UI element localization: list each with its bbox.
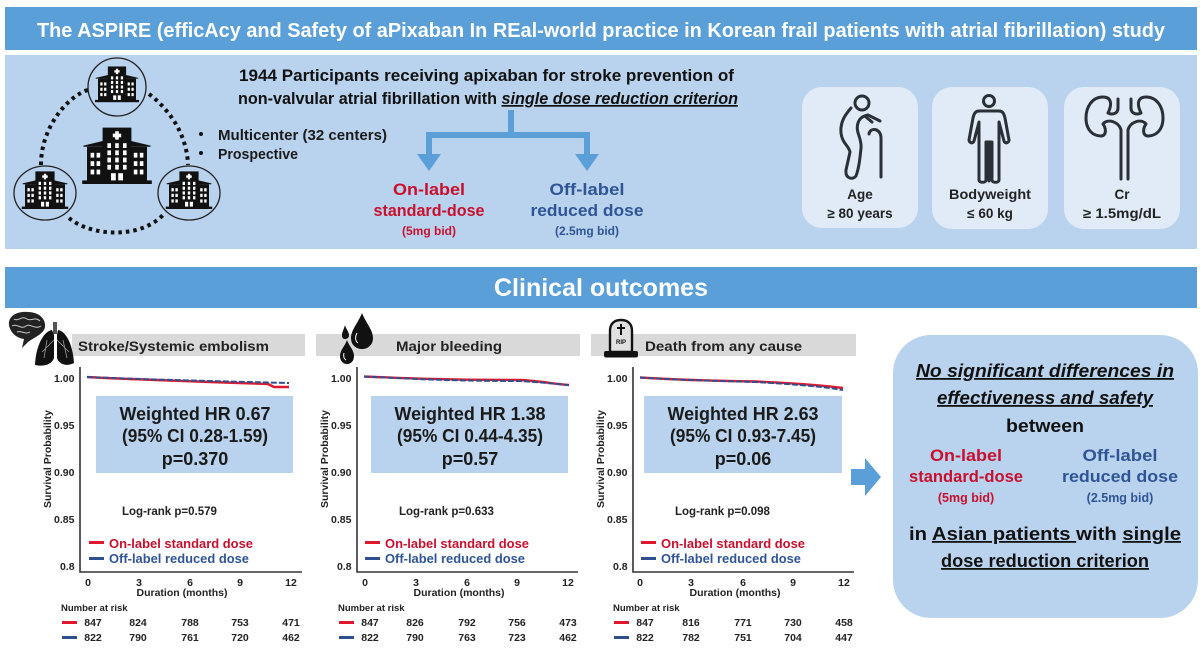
survival chart [319,367,578,599]
legend: On-label standard dose [109,537,253,551]
panel: stroke/systemic embolism [9,312,305,644]
outcome heading: Death from any cause [645,338,802,354]
heading: clinical outcomes: Clinical outcomes [494,274,708,302]
on-label dose: (5mg bid) [938,491,994,505]
card: age: ≥ 80 years [827,206,893,221]
survival chart: 3 [413,577,419,589]
number at risk table: 826 [406,617,424,629]
survival chart: 9 [237,577,243,589]
survival chart: 0.90 [331,467,352,479]
survival chart: Log-rank p=0.579 [122,506,217,518]
survival chart: 6 [464,577,470,589]
hazard ratio box [96,396,293,473]
survival chart: Log-rank p=0.633 [399,506,494,518]
hazard ratio box: (95% CI 0.28-1.59) [122,426,268,446]
survival chart: 0.8 [613,561,628,573]
card: creatinine [1064,87,1180,229]
number at risk table: 720 [231,632,249,644]
participants text: 1944 Participants receiving apixaban for stroke prevention of [239,66,734,85]
conclusion statement: No significant differences in [916,361,1174,381]
card: bodyweight: ≤ 60 kg [967,206,1013,221]
survival chart: Survival Probability [319,410,331,508]
number at risk table: 847 [84,617,102,629]
icon: elderly person with cane [841,96,881,178]
number at risk table: 822 [361,632,379,644]
number at risk table: 447 [835,632,853,644]
survival chart: 0.95 [607,420,628,432]
number at risk table [613,603,853,644]
survival chart: 0 [362,577,368,589]
on-label dose [374,180,484,238]
card: age [802,87,918,228]
card: bodyweight: Bodyweight [949,187,1032,202]
number at risk table: 753 [231,617,249,629]
patient population: dose reduction criterion [941,551,1149,571]
legend [641,537,805,566]
survival chart: 1.00 [607,373,628,385]
legend: On-label standard dose [385,537,529,551]
off-label dose: reduced dose [1062,467,1178,486]
icon: brain and lungs [9,312,74,366]
off-label dose: Off-label [1082,446,1158,465]
survival chart: 12 [285,577,297,589]
number at risk table: 847 [636,617,654,629]
survival chart: 3 [688,577,694,589]
legend: Off-label reduced dose [109,552,249,566]
card: creatinine: ≥ 1.5mg/dL [1083,206,1161,221]
card: bodyweight [932,87,1048,229]
outcome heading: Major bleeding [396,338,502,354]
hazard ratio box: Weighted HR 1.38 [394,404,546,424]
off-label dose: (2.5mg bid) [1087,491,1153,505]
off-label dose: Off-label [550,180,624,199]
heading: clinical outcomes [5,267,1197,308]
panel: death from any cause [591,320,856,644]
survival chart: Log-rank p=0.098 [675,506,771,518]
number at risk table: 792 [458,617,476,629]
off-label dose: (2.5mg bid) [555,224,619,238]
card: creatinine: Cr [1114,187,1130,202]
survival chart: 0.95 [331,420,352,432]
survival chart: 0 [85,577,91,589]
on-label dose: (5mg bid) [402,224,456,238]
survival chart: 0.95 [54,420,75,432]
survival chart: 0.90 [607,467,628,479]
icon: gravestone: RIP [616,340,626,346]
number at risk table: 790 [406,632,424,644]
on-label dose [909,446,1023,505]
hazard ratio box: p=0.57 [442,449,498,469]
icon: kidneys [1086,97,1163,179]
participants text [238,66,738,108]
number at risk table: 790 [129,632,147,644]
survival chart: 3 [136,577,142,589]
survival chart: 1.00 [54,373,75,385]
number at risk table: 756 [508,617,526,629]
number at risk table: 458 [835,617,853,629]
conclusion statement: between [1006,416,1084,436]
legend: Off-label reduced dose [385,552,525,566]
outcome heading [591,334,856,356]
survival chart: Survival Probability [42,410,54,508]
hazard ratio box: Weighted HR 0.67 [120,404,270,424]
icon: hospital network [14,58,220,232]
survival chart: 9 [790,577,796,589]
conclusion statement [916,361,1174,436]
icon: gravestone [604,320,638,358]
participants text: non-valvular atrial fibrillation with single dose reduction criterion [238,89,738,108]
survival chart: 0.8 [337,561,352,573]
survival chart: 6 [187,577,193,589]
number at risk table: 824 [129,617,147,629]
survival chart: 0.85 [54,514,75,526]
outcome heading: Stroke/Systemic embolism [78,338,269,354]
outcome heading [72,334,305,356]
number at risk table: 473 [559,617,577,629]
patient population: in Asian patients with single [909,524,1181,544]
survival chart: 0.85 [331,514,352,526]
panel: major bleeding [316,313,580,644]
title banner [5,7,1197,50]
number at risk table: 723 [508,632,526,644]
legend: Off-label reduced dose [661,552,801,566]
survival chart: Survival Probability [595,410,607,508]
survival chart: Duration (months) [136,587,228,599]
off-label dose: reduced dose [530,201,644,220]
number at risk table [61,603,300,644]
survival chart: 9 [514,577,520,589]
survival chart: 0.85 [607,514,628,526]
patient population [909,524,1181,571]
icon: blood drops [340,313,373,364]
arrows: dose split [417,110,599,171]
off-label dose [1062,446,1178,505]
legend [89,537,253,566]
number at risk table [338,603,577,644]
number at risk table: 471 [282,617,300,629]
legend [365,537,529,566]
number at risk table: Number at risk [613,603,680,614]
number at risk table: 462 [282,632,300,644]
survival chart: 12 [838,577,850,589]
study design bullets [199,128,387,163]
off-label dose [530,180,644,238]
legend: On-label standard dose [661,537,805,551]
number at risk table: 462 [559,632,577,644]
hazard ratio box: p=0.370 [162,449,228,469]
conclusion statement: effectiveness and safety [937,388,1154,408]
survival chart [595,367,854,599]
icon: standing person [969,96,1009,182]
number at risk table: 822 [636,632,654,644]
hazard ratio box: (95% CI 0.93-7.45) [670,426,816,446]
number at risk table: 730 [784,617,802,629]
outcome heading [316,334,580,356]
number at risk table: 822 [84,632,102,644]
number at risk table: 761 [181,632,199,644]
number at risk table: 704 [784,632,802,644]
on-label dose: standard-dose [374,201,484,220]
number at risk table: 847 [361,617,379,629]
arrow: to conclusion [851,458,881,496]
on-label dose: standard-dose [909,467,1023,486]
survival chart: Duration (months) [690,587,780,599]
hazard ratio box: (95% CI 0.44-4.35) [397,426,543,446]
number at risk table: 751 [734,632,752,644]
survival chart: 1.00 [331,373,352,385]
number at risk table: 816 [682,617,700,629]
survival chart: 12 [562,577,574,589]
survival chart: 0 [637,577,643,589]
survival chart: 0.90 [54,467,75,479]
title banner: The ASPIRE (efficAcy and Safety of aPixaban In REal-world practice in Korean frail patients with atrial fibrillation) study [37,19,1166,42]
study design bullets: Prospective [218,147,298,163]
number at risk table: 771 [734,617,752,629]
survival chart [42,367,302,599]
hazard ratio box [371,396,568,473]
panel: study design [5,55,1197,249]
number at risk table: 763 [458,632,476,644]
on-label dose: On-label [393,180,465,199]
panel: conclusion [893,335,1198,618]
hazard ratio box: p=0.06 [715,449,771,469]
number at risk table: 788 [181,617,199,629]
survival chart: 0.8 [60,561,75,573]
hazard ratio box [644,396,842,473]
number at risk table: Number at risk [338,603,405,614]
survival chart: Duration (months) [414,587,504,599]
survival chart: 6 [740,577,746,589]
study design bullets: Multicenter (32 centers) [218,128,387,144]
hazard ratio box: Weighted HR 2.63 [668,404,818,424]
card: age: Age [847,187,873,202]
on-label dose: On-label [930,446,1002,465]
number at risk table: 782 [682,632,700,644]
number at risk table: Number at risk [61,603,128,614]
